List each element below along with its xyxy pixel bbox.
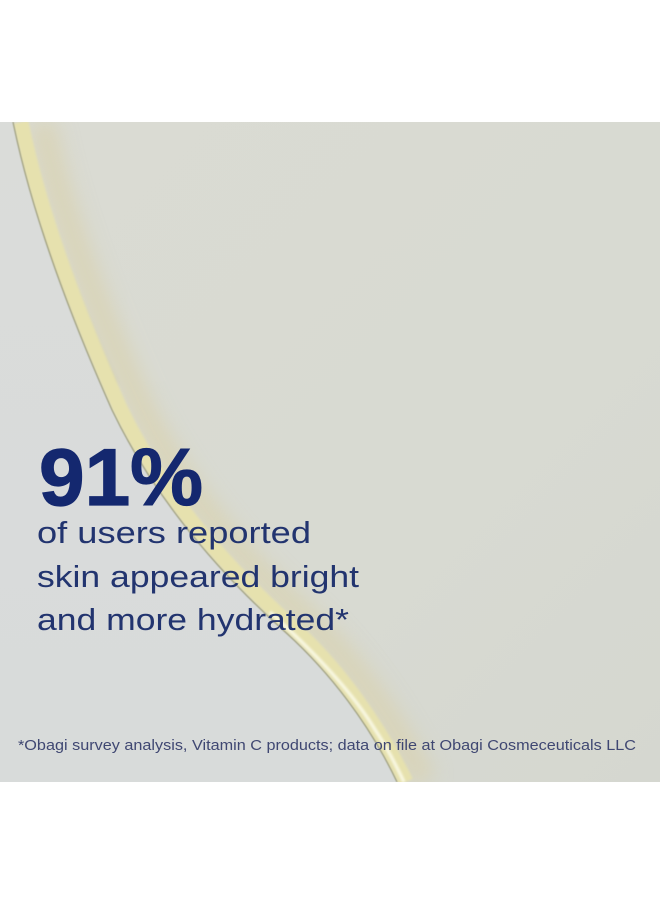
body text: skin appeared bright [37, 559, 359, 594]
headline statistic: 91% [39, 433, 203, 523]
photo: oil texture background with curved edge [0, 122, 660, 782]
footnote: *Obagi survey analysis, Vitamin C products; data on file at Obagi Cosmeceuticals LLC [18, 738, 636, 754]
body text: of users reported [37, 515, 311, 550]
body text: and more hydrated* [37, 602, 349, 637]
body text [37, 515, 359, 637]
